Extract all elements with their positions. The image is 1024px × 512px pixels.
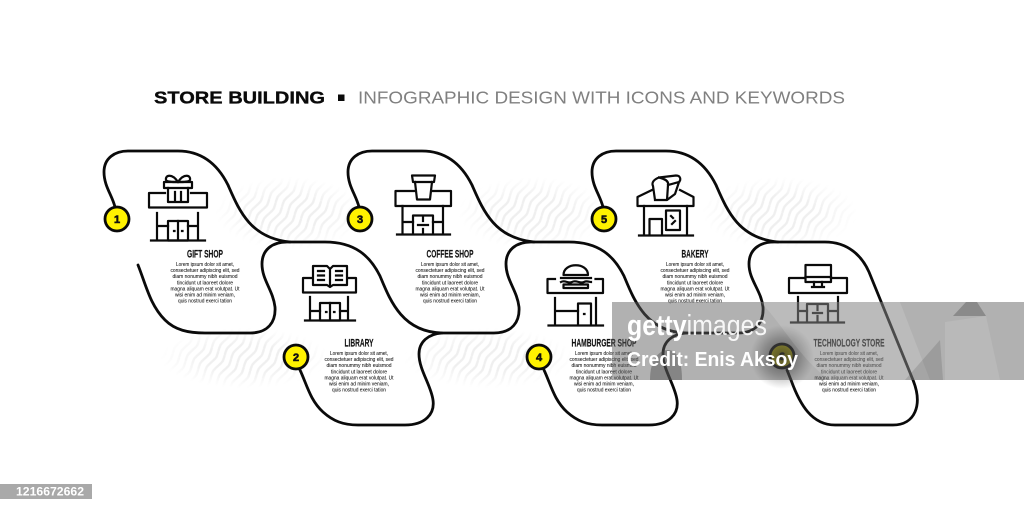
text block: gift shop: magna aliquam erat volutpat. Ut xyxy=(170,286,240,292)
text block: hamburger shop: consectetuer adipiscing elit, sed xyxy=(570,357,638,363)
text block: coffee shop: consectetuer adipiscing elit, sed xyxy=(416,268,484,274)
icon: hamburger shop building xyxy=(548,265,603,326)
text block: library: quis nostrud exerci tation xyxy=(332,388,386,394)
text block: gift shop: tincidunt ut laoreet dolore xyxy=(177,280,233,286)
text block: gift shop: quis nostrud exerci tation xyxy=(178,299,232,305)
icon: technology store building xyxy=(789,265,847,322)
text block: library xyxy=(324,351,394,394)
text block: coffee shop: magna aliquam erat volutpat. Ut xyxy=(416,286,485,292)
badge 6: 6 xyxy=(779,351,785,363)
heading: technology store: TECHNOLOGY STORE xyxy=(814,338,884,350)
text block: coffee shop: wisi enim ad minim veniam, xyxy=(419,292,480,298)
text block: hamburger shop: quis nostrud exerci tation xyxy=(577,388,631,394)
text block: bakery: quis nostrud exerci tation xyxy=(668,299,722,305)
watermark band: gettyimages xyxy=(627,310,767,342)
text block: bakery: Lorem ipsum dolor sit amet, xyxy=(666,262,724,268)
text block: technology store: magna aliquam erat volutpat. Ut xyxy=(814,375,884,381)
text block: gift shop: diam nonummy nibh euismod xyxy=(172,274,238,280)
panel: technology store xyxy=(770,265,884,394)
text block: technology store xyxy=(814,351,884,394)
text block: gift shop: consectetuer adipiscing elit, sed xyxy=(170,268,240,274)
heading: gift shop: GIFT SHOP xyxy=(187,248,223,260)
text block: gift shop: wisi enim ad minim veniam, xyxy=(174,292,235,298)
badge 3: 3 xyxy=(357,214,363,226)
heading: library: LIBRARY xyxy=(344,338,374,350)
title: INFOGRAPHIC DESIGN WITH ICONS AND KEYWORDS xyxy=(358,88,845,108)
text block: library: Lorem ipsum dolor sit amet, xyxy=(330,351,388,357)
text block: bakery: tincidunt ut laoreet dolore xyxy=(667,280,723,286)
text block: technology store: wisi enim ad minim veniam, xyxy=(818,382,879,388)
heading: coffee shop: COFFEE SHOP xyxy=(426,248,474,260)
watermark band xyxy=(612,302,1024,389)
text block: hamburger shop: magna aliquam erat volutpat. Ut xyxy=(570,375,639,381)
panel: library xyxy=(284,266,394,394)
heading: hamburger shop: HAMBURGER SHOP xyxy=(572,338,636,350)
text block: technology store: Lorem ipsum dolor sit amet, xyxy=(820,351,878,357)
text block: library: wisi enim ad minim veniam, xyxy=(328,382,389,388)
text block: technology store: consectetuer adipiscing elit, sed xyxy=(814,357,884,363)
icon: bakery building xyxy=(638,176,694,236)
panel: coffee shop xyxy=(348,176,485,305)
text block: coffee shop: diam nonummy nibh euismod xyxy=(418,274,482,280)
text block: bakery: consectetuer adipiscing elit, sed xyxy=(660,268,730,274)
text block: hamburger shop: wisi enim ad minim veniam, xyxy=(573,382,634,388)
text block: coffee shop: tincidunt ut laoreet dolore xyxy=(422,280,478,286)
icon: library building xyxy=(303,266,356,320)
text block: technology store: quis nostrud exerci tation xyxy=(822,388,876,394)
watermark band: Credit: Enis Aksoy xyxy=(627,349,799,371)
text block: bakery: diam nonummy nibh euismod xyxy=(662,274,728,280)
icon: coffee shop building xyxy=(396,176,451,234)
text block: hamburger shop: Lorem ipsum dolor sit amet, xyxy=(575,351,633,357)
badge 1: 1 xyxy=(114,214,120,226)
image id tag: 1216672662 xyxy=(16,486,84,498)
timeline outline xyxy=(104,151,917,425)
title xyxy=(154,88,845,108)
title: STORE BUILDING xyxy=(154,88,325,108)
text block: coffee shop: Lorem ipsum dolor sit amet, xyxy=(421,262,479,268)
text block: library: tincidunt ut laoreet dolore xyxy=(331,369,387,375)
heading: bakery: BAKERY xyxy=(682,248,709,260)
icon: gift shop building xyxy=(149,176,207,240)
text block: coffee shop xyxy=(416,262,485,305)
wavy background texture xyxy=(185,188,836,379)
text block: coffee shop: quis nostrud exerci tation xyxy=(423,299,477,305)
text block: technology store: diam nonummy nibh euismod xyxy=(816,363,882,369)
text block: gift shop: Lorem ipsum dolor sit amet, xyxy=(176,262,234,268)
text block: library: diam nonummy nibh euismod xyxy=(326,363,392,369)
badge 5: 5 xyxy=(601,214,607,226)
panel: hamburger shop xyxy=(527,265,639,394)
text block: library: magna aliquam erat volutpat. Ut xyxy=(324,375,394,381)
text block: hamburger shop: diam nonummy nibh euismod xyxy=(572,363,636,369)
text block: hamburger shop: tincidunt ut laoreet dolore xyxy=(576,369,632,375)
badge 2: 2 xyxy=(293,352,299,364)
text block: library: consectetuer adipiscing elit, sed xyxy=(324,357,394,363)
image id tag xyxy=(0,484,92,499)
panel: gift shop xyxy=(105,176,240,305)
badge 4: 4 xyxy=(536,352,543,364)
text block: gift shop xyxy=(170,262,240,305)
panel: bakery xyxy=(592,176,730,305)
text block: bakery: wisi enim ad minim veniam, xyxy=(664,292,725,298)
text block: bakery xyxy=(660,262,730,305)
text block: hamburger shop xyxy=(570,351,639,394)
text block: technology store: tincidunt ut laoreet dolore xyxy=(821,369,877,375)
text block: bakery: magna aliquam erat volutpat. Ut xyxy=(660,286,730,292)
